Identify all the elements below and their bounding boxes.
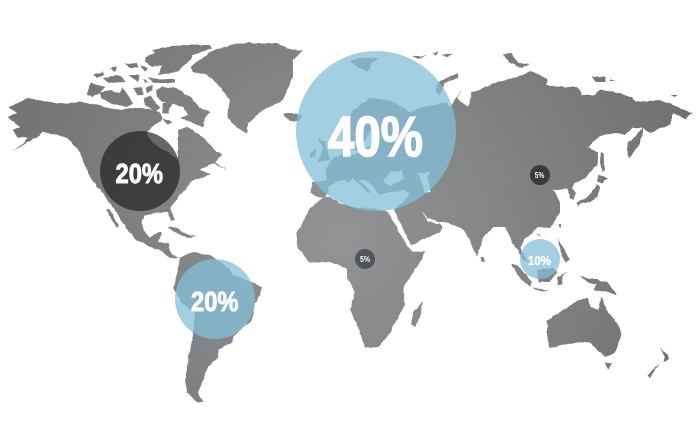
bubble: Africa 5%: 5% [360, 254, 370, 264]
bubble: North America 20%: 20% [116, 158, 163, 189]
Cuba and Hispaniola [167, 227, 197, 238]
North and Central America [8, 98, 227, 258]
Southeast Asia islands [481, 224, 570, 291]
South America [173, 252, 262, 403]
Baja California [106, 209, 119, 227]
Sakhalin, Hokkaido and Honshu [577, 152, 608, 207]
New Guinea [580, 276, 617, 295]
New Zealand [647, 348, 669, 377]
bubble: Southeast Asia 10% [520, 239, 560, 279]
Australia [547, 297, 622, 357]
bubble: Europe 40%: 40% [328, 105, 423, 169]
Greenland [190, 43, 303, 133]
bubble: South America 20% [175, 259, 255, 339]
Arctic Canada islands [87, 45, 212, 127]
bubble: South America 20%: 20% [191, 286, 239, 317]
bubble: Asia 5%: 5% [535, 170, 545, 180]
Black Sea, Caspian Sea, Persian Gulf [383, 171, 440, 224]
Iceland [283, 113, 302, 121]
Eurasia [311, 71, 692, 262]
Madagascar [411, 301, 423, 327]
Kamchatka [627, 127, 643, 158]
Eurasian islands [350, 52, 677, 97]
Tasmania [605, 363, 612, 370]
United Kingdom and Ireland [310, 138, 330, 162]
bubble: Europe 40% [296, 51, 456, 211]
Africa [297, 197, 426, 348]
bubble: Asia 5% [530, 165, 550, 185]
bubble: North America 20% [100, 131, 180, 211]
bubble: Southeast Asia 10%: 10% [528, 253, 551, 268]
bubble: Africa 5% [355, 249, 375, 269]
